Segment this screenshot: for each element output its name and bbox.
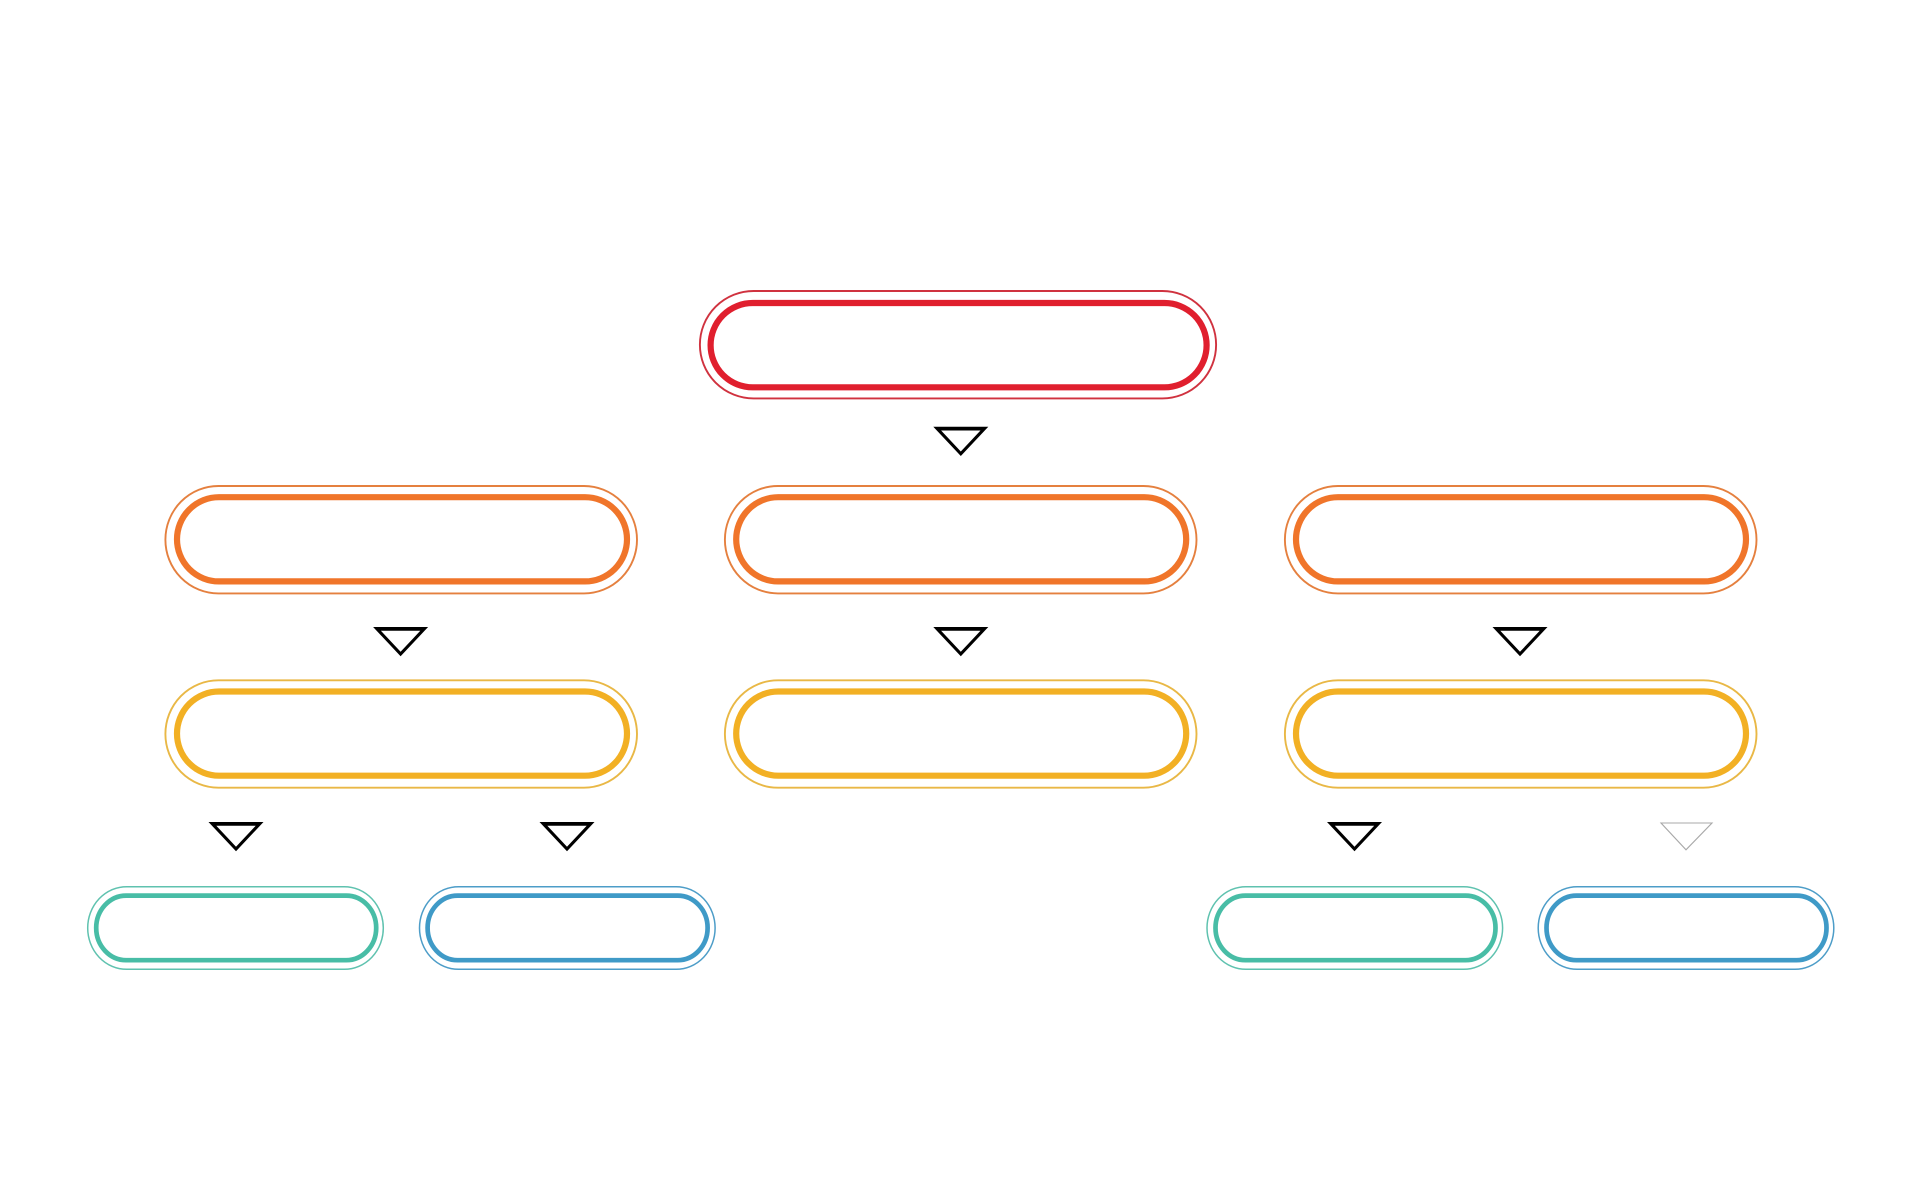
left yellow pill [165, 680, 637, 788]
arrow: right yellow to right blue (faint) [1661, 823, 1712, 850]
left blue pill [420, 887, 715, 969]
arrow: left yellow to left blue [540, 822, 594, 851]
right teal pill [1207, 887, 1503, 969]
left teal pill [88, 887, 383, 969]
right blue pill [1538, 887, 1834, 969]
arrow: centre orange to centre yellow [933, 627, 988, 656]
arrow: left yellow to left teal [208, 822, 264, 851]
right yellow pill [1285, 680, 1756, 788]
left orange pill [165, 486, 637, 593]
centre yellow pill [725, 680, 1196, 788]
arrow: right yellow to right teal [1327, 822, 1382, 851]
top node: red pill [700, 291, 1216, 398]
right orange pill [1285, 486, 1756, 593]
arrow: left orange to left yellow [373, 627, 428, 656]
arrow: top to centre orange [933, 427, 988, 456]
arrow: right orange to right yellow [1492, 627, 1548, 656]
centre orange pill [725, 486, 1196, 593]
